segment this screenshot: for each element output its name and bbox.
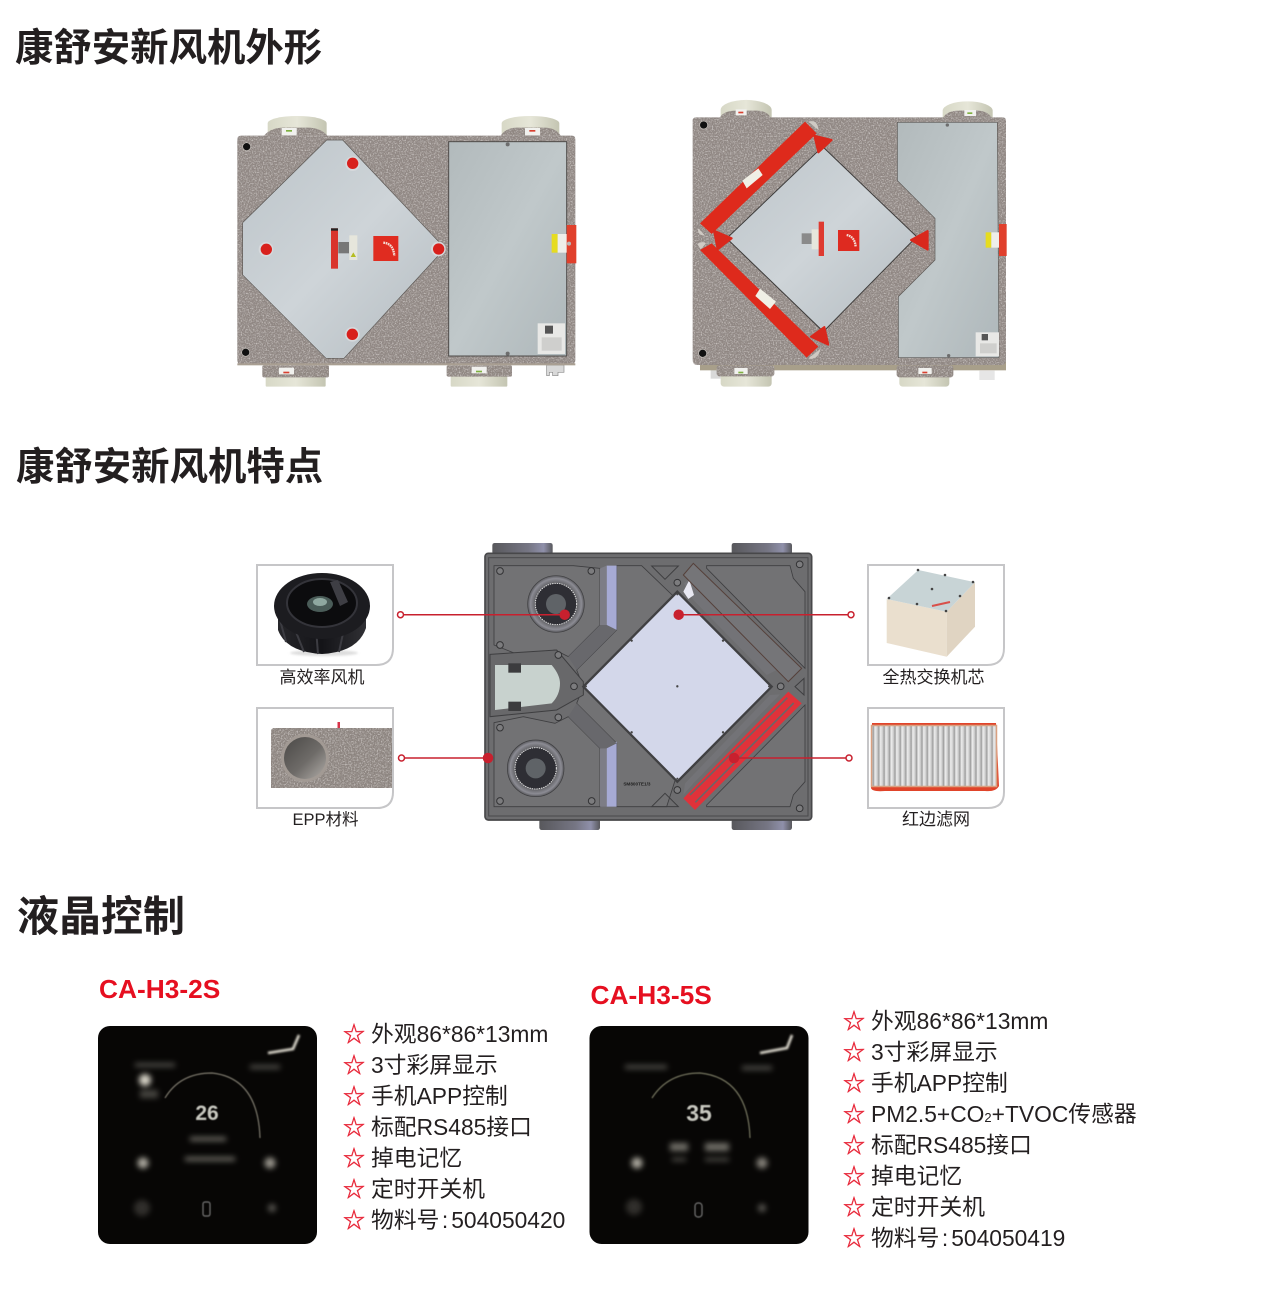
feature list CA-H3-2S: ☆ bbox=[343, 1146, 365, 1171]
feature list CA-H3-5S: 标配RS485接口 bbox=[871, 1132, 1032, 1158]
callout: core bbox=[674, 610, 854, 619]
feature list CA-H3-5S: 3寸彩屏显示 bbox=[871, 1039, 998, 1065]
heading: 特点: 康舒安新风机特点 bbox=[16, 446, 323, 489]
feature list CA-H3-5S: PM2.5+CO2+TVOC传感器 bbox=[871, 1101, 1137, 1127]
feature list CA-H3-2S: ☆ bbox=[343, 1115, 365, 1140]
caption: EPP材料 bbox=[292, 810, 359, 829]
exchanger diamond bbox=[583, 592, 772, 782]
screws bbox=[497, 561, 803, 812]
filter bbox=[871, 723, 999, 791]
feature list CA-H3-2S: ☆ bbox=[343, 1084, 365, 1109]
thumbnail: heat exchanger core bbox=[868, 565, 1004, 665]
callout: filter bbox=[730, 754, 852, 762]
stepped service panel bbox=[897, 122, 1007, 358]
feature list CA-H3-2S: ☆ bbox=[343, 1208, 365, 1233]
feature list CA-H3-2S: 外观86*86*13mm bbox=[371, 1021, 548, 1047]
core cube bbox=[887, 569, 975, 657]
bottom ducts bbox=[262, 365, 564, 387]
red corner clips bbox=[714, 136, 928, 345]
feature list CA-H3-5S: ☆ bbox=[843, 1102, 865, 1127]
heading: 液晶控制: 液晶控制 bbox=[17, 893, 185, 940]
model mark: SM800TE1/3 bbox=[623, 781, 651, 786]
feature list CA-H3-2S: 标配RS485接口 bbox=[371, 1114, 532, 1140]
controller CA-H3-5S: 35 bbox=[686, 1100, 712, 1126]
feature list CA-H3-5S: 定时开关机 bbox=[871, 1194, 985, 1220]
filter slot notches bbox=[697, 121, 820, 359]
thumbnail: fan bbox=[257, 565, 393, 665]
feature list CA-H3-2S: 手机APP控制 bbox=[371, 1083, 508, 1109]
model name: CA-H3-5S bbox=[590, 980, 712, 1010]
feature list CA-H3-2S: 定时开关机 bbox=[371, 1176, 485, 1202]
control bay bbox=[490, 650, 583, 717]
feature list CA-H3-5S: ☆ bbox=[843, 1071, 865, 1096]
controller CA-H3-2S bbox=[98, 1026, 317, 1244]
diamond access panel bbox=[243, 140, 446, 358]
bottom ducts bbox=[700, 362, 1006, 387]
impeller icon bbox=[274, 573, 370, 656]
feature list CA-H3-5S: 物料号:504050419 bbox=[871, 1225, 1065, 1251]
EPP block with duct hole bbox=[271, 728, 392, 788]
callout: EPP bbox=[398, 754, 492, 762]
controller CA-H3-2S: 26 bbox=[195, 1102, 219, 1125]
feature list CA-H3-5S bbox=[843, 1008, 1137, 1251]
top ducts bbox=[264, 116, 561, 136]
EPP body bbox=[693, 117, 1006, 365]
casing bbox=[485, 553, 812, 820]
feature list CA-H3-2S: ☆ bbox=[343, 1022, 365, 1047]
feature list CA-H3-2S: 掉电记忆 bbox=[371, 1145, 462, 1171]
callout lines bbox=[398, 610, 854, 762]
diagram: internal structure bbox=[485, 543, 812, 830]
product photo: rear unit with red filter strips bbox=[693, 100, 1007, 387]
feature list CA-H3-2S: 物料号:504050420 bbox=[371, 1207, 565, 1233]
red-edge filter bbox=[683, 692, 802, 810]
diamond heat-exchanger cover bbox=[727, 147, 917, 332]
feature list CA-H3-2S: ☆ bbox=[343, 1177, 365, 1202]
ducts bbox=[492, 543, 792, 830]
caption: 红边滤网 bbox=[902, 810, 970, 829]
caption: 高效率风机 bbox=[280, 668, 364, 687]
feature list CA-H3-5S: ☆ bbox=[843, 1195, 865, 1220]
feature list CA-H3-5S: ☆ bbox=[843, 1226, 865, 1251]
caption: 全热交换机芯 bbox=[882, 668, 984, 687]
thumbnail: EPP material bbox=[257, 708, 393, 808]
EPP body bbox=[237, 136, 575, 365]
feature list CA-H3-2S: 3寸彩屏显示 bbox=[371, 1052, 498, 1078]
controller CA-H3-5S bbox=[590, 1026, 808, 1244]
vent triangles bbox=[652, 566, 804, 807]
feature list CA-H3-5S: ☆ bbox=[843, 1164, 865, 1189]
red filter strips bbox=[700, 122, 818, 358]
upper-right filter bbox=[683, 563, 802, 682]
feature list CA-H3-5S: 手机APP控制 bbox=[871, 1070, 1008, 1096]
product photo: front unit with square panel bbox=[237, 116, 576, 387]
thumbnail: red-edge filter bbox=[868, 708, 1004, 808]
fan upper bbox=[528, 576, 584, 632]
feature list CA-H3-5S: 外观86*86*13mm bbox=[871, 1008, 1048, 1034]
feature list CA-H3-2S bbox=[343, 1021, 565, 1233]
top ducts bbox=[720, 100, 993, 117]
chambers bbox=[494, 566, 805, 807]
feature list CA-H3-5S: ☆ bbox=[843, 1133, 865, 1158]
lavender walls bbox=[568, 566, 617, 807]
heading: 外形: 康舒安新风机外形 bbox=[15, 27, 322, 70]
feature list CA-H3-5S: ☆ bbox=[843, 1040, 865, 1065]
callout: fan bbox=[398, 610, 569, 619]
service door panel bbox=[449, 142, 576, 356]
feature list CA-H3-2S: ☆ bbox=[343, 1053, 365, 1078]
feature list CA-H3-5S: 掉电记忆 bbox=[871, 1163, 962, 1189]
model name: CA-H3-2S bbox=[99, 974, 220, 1004]
fan lower bbox=[507, 740, 564, 797]
feature list CA-H3-5S: ☆ bbox=[843, 1009, 865, 1034]
